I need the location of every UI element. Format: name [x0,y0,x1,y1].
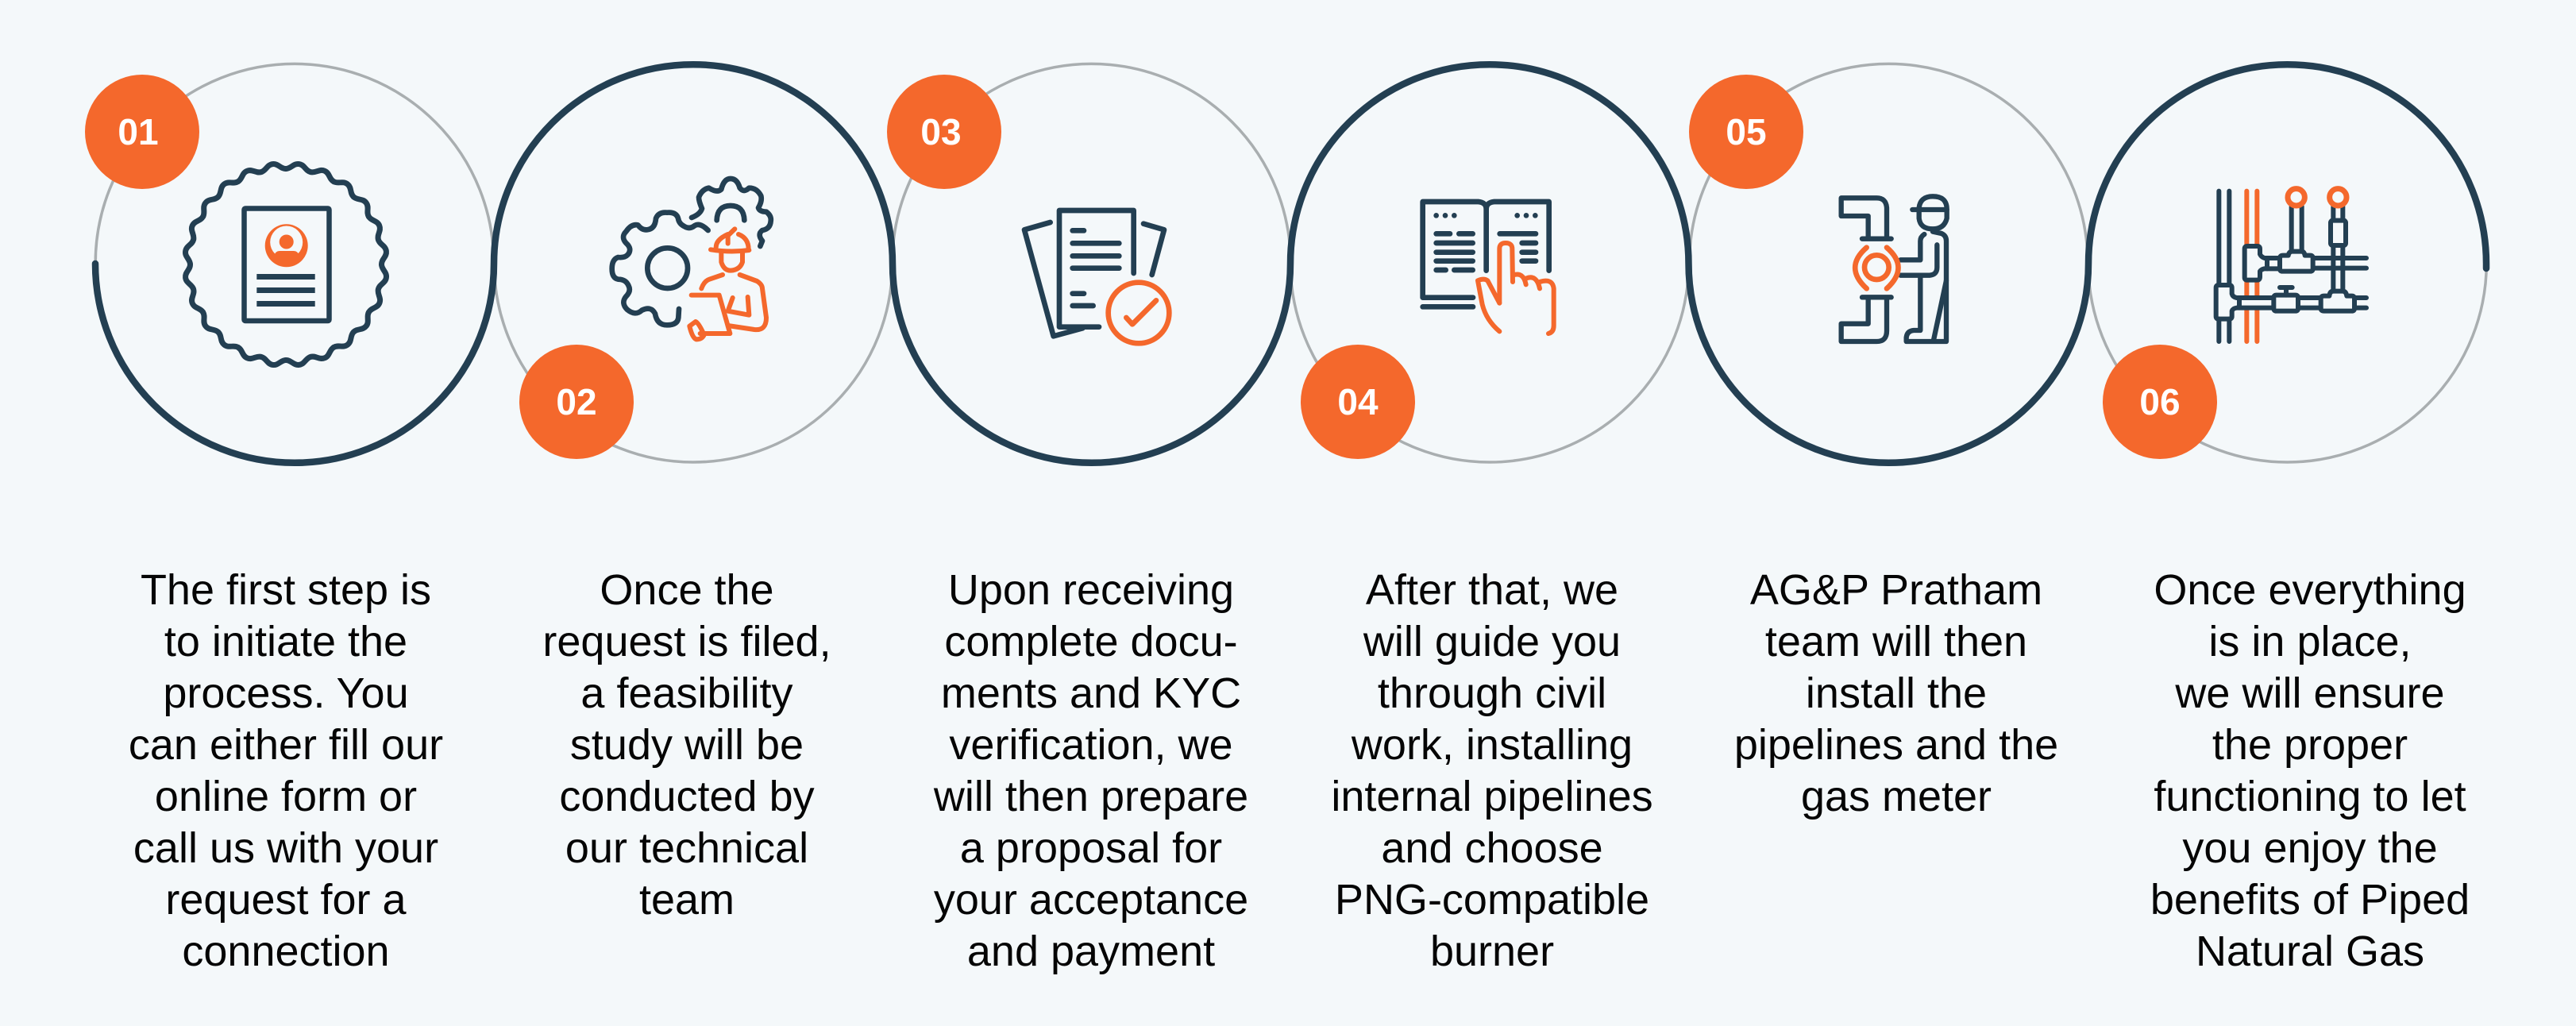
text: step 5 description: AG&P Pratham [1750,566,2042,614]
text: step 4 description: through civil [1378,669,1606,717]
badge 02 [519,345,634,459]
dark wavy process connector line [95,64,2486,463]
text: step 3 description: verification, we [949,721,1233,769]
text: step 2 description: request is filed, [542,618,831,665]
badge 01 [85,75,199,189]
thin grey ring circles [95,64,2486,462]
icon: open book with pointing hand [1423,202,1554,334]
text: step 5 description: install the [1806,669,1987,717]
text: step 6 description: benefits of Piped [2150,876,2470,924]
text: step 3 description: your acceptance [934,876,1248,924]
text: step 4 description: will guide you [1363,618,1621,665]
text: step 6 description: functioning to let [2154,773,2466,820]
text: step 5 description: pipelines and the [1734,721,2058,769]
text: step 3 description: complete docu- [944,618,1238,665]
text: step 4 description: work, installing [1351,721,1633,769]
icon: application form in scalloped seal [183,161,389,368]
text: step 3 description: ments and KYC [941,669,1241,717]
text: step 4 description: PNG-compatible [1335,876,1649,924]
text: step 2 description: our technical [565,824,808,872]
icon: documents with check mark [1024,210,1169,343]
text: step 6 description: we will ensure [2174,669,2445,717]
icon: worker installing pipe and gas meter [1841,196,1947,341]
text: step 6 description: the proper [2212,721,2408,769]
text: step 4 description: and choose [1381,824,1603,872]
text: step 6 description: is in place, [2208,618,2412,665]
text: step 3 description: will then prepare [933,773,1248,820]
text: step 2 description: team [639,876,735,924]
badge 03 [887,75,1001,189]
text: step 3 description: a proposal for [960,824,1222,872]
text: step 1 description: can either fill our [129,721,443,769]
text: step 1 description: The first step is [141,566,431,614]
text: step 6 description: Once everything [2154,566,2466,614]
badge 04: 04 [1337,381,1379,422]
text: step 3 description: and payment [967,928,1215,975]
text: step 6 description: you enjoy the [2182,824,2438,872]
badge 04 [1301,345,1415,459]
text: step 2 description: conducted by [559,773,815,820]
badge 01: 01 [118,111,159,152]
text: step 6 description: Natural Gas [2196,928,2424,975]
icon: pipe network with valves [2216,189,2366,341]
text: step 5 description: team will then [1765,618,2027,665]
text: step 5 description: gas meter [1801,773,1992,820]
text: step 1 description: to initiate the [164,618,407,665]
text: step 1 description: request for a [165,876,407,924]
badge 05: 05 [1726,111,1767,152]
text: step 1 description: call us with your [133,824,438,872]
text: step 3 description: Upon receiving [948,566,1234,614]
badge 03: 03 [920,111,962,152]
text: step 4 description: burner [1430,928,1554,975]
text: step 1 description: process. You [163,669,409,717]
icon: gears and engineer with clipboard [612,179,771,339]
text: step 4 description: internal pipelines [1331,773,1653,820]
badge 05 [1689,75,1803,189]
text: step 2 description: study will be [570,721,804,769]
text: step 4 description: After that, we [1366,566,1618,614]
badge 06: 06 [2139,381,2181,422]
text: step 1 description: online form or [155,773,417,820]
text: step 2 description: a feasibility [580,669,793,717]
badge 06 [2103,345,2217,459]
text: step 2 description: Once the [600,566,774,614]
text: step 1 description: connection [182,928,390,975]
badge 02: 02 [556,381,597,422]
